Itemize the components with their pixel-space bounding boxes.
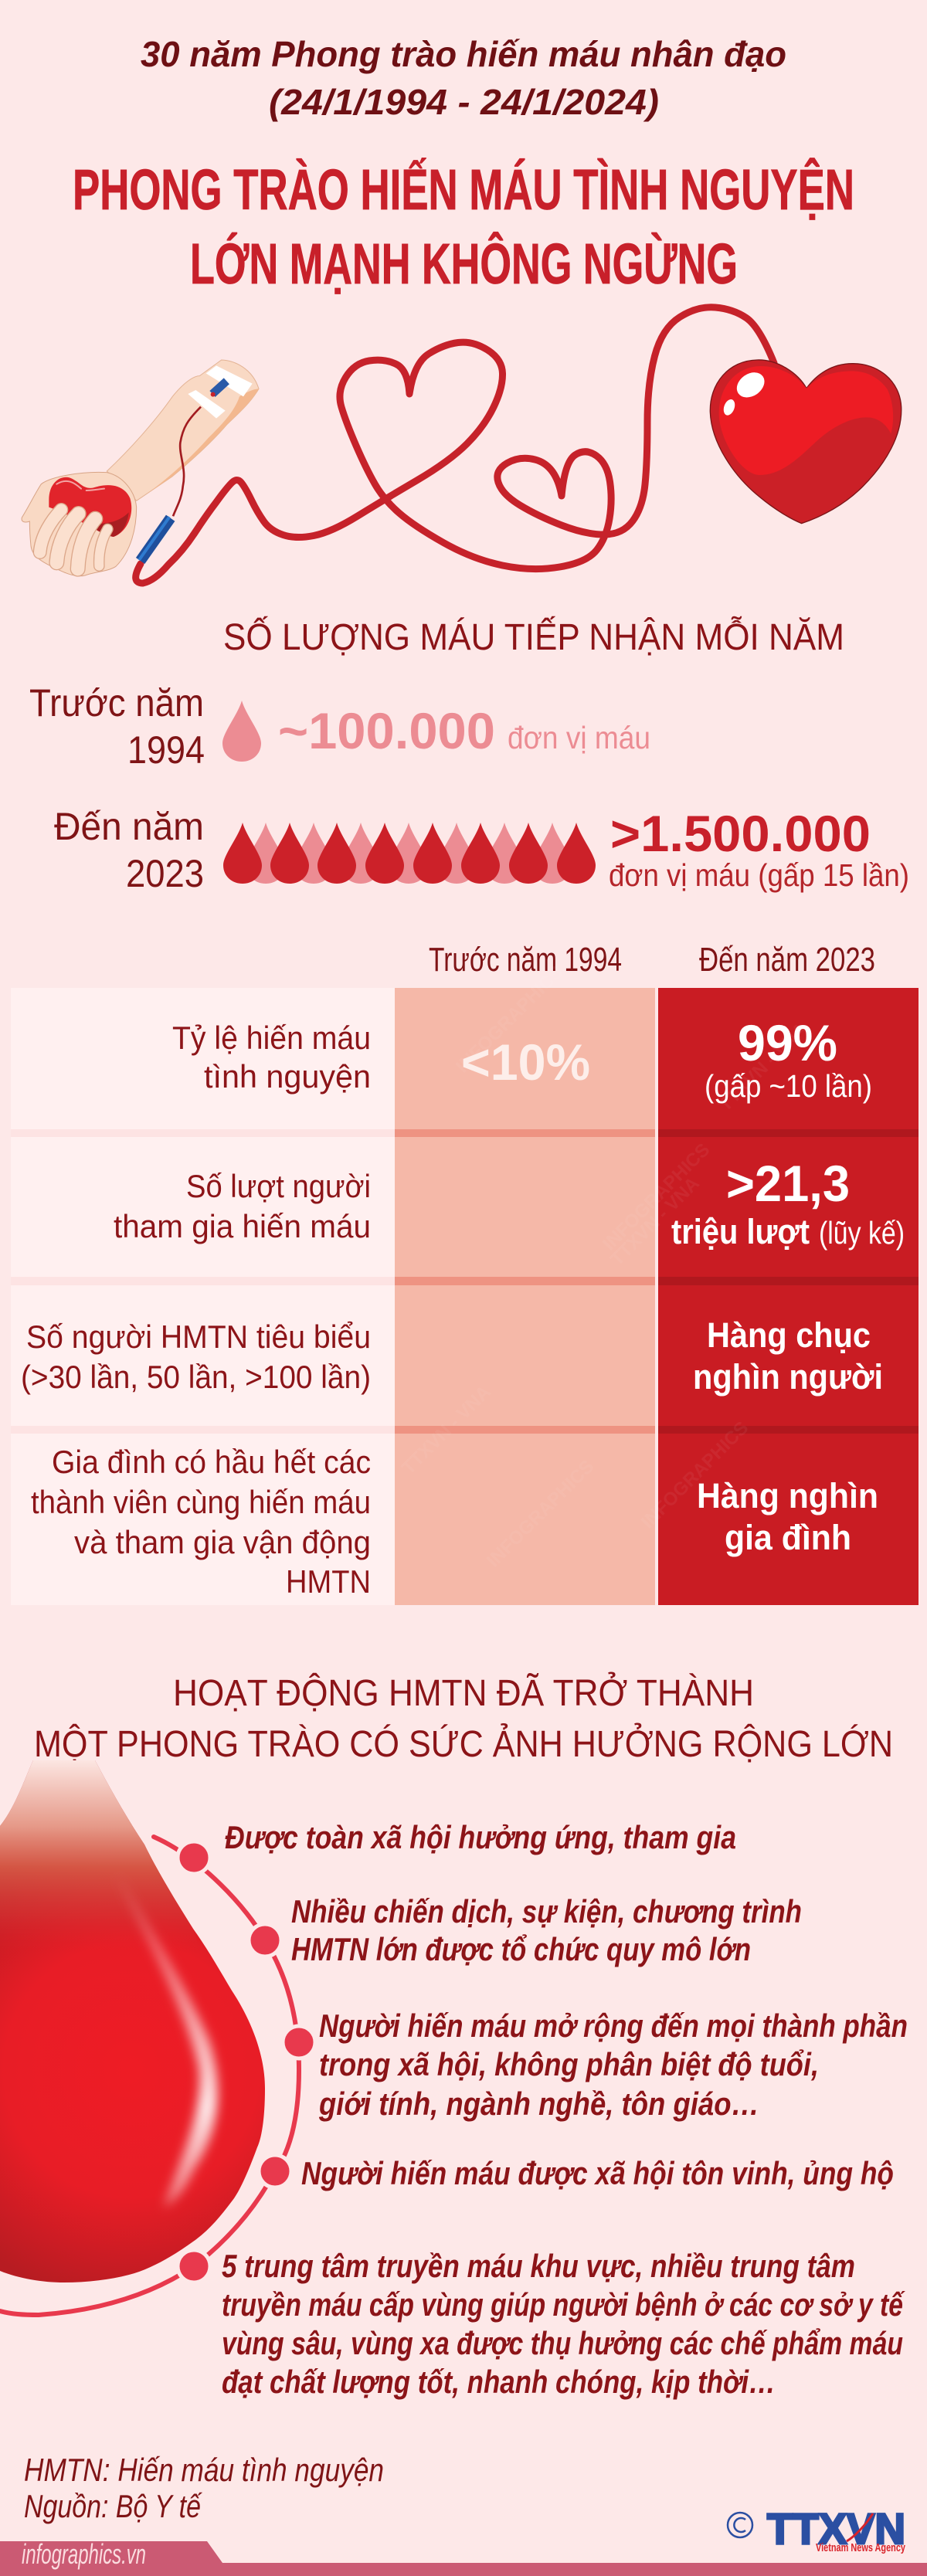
label: to 2023 xyxy=(54,805,204,895)
row 3: exemplary donors: Hàng chục xyxy=(707,1315,871,1355)
faint watermarks: TTXVN - VNA xyxy=(715,1019,812,1115)
row 4: donor families: và tham gia vận động xyxy=(74,1524,371,1560)
icon: tapes and cannula xyxy=(173,365,253,516)
row 2: participants xyxy=(114,1155,905,1251)
row 4: donor families: Hàng nghìn xyxy=(697,1476,878,1515)
row 1: voluntary donation rate: (gấp ~10 lần) xyxy=(705,1068,872,1104)
row 2: participants: triệu lượt xyxy=(671,1212,810,1251)
label: to 2023: Đến năm xyxy=(54,805,204,848)
heading: movement influence xyxy=(34,1672,893,1765)
row 4: donor families xyxy=(31,1444,878,1600)
label: before 1994: 1994 xyxy=(127,728,205,772)
table column headers: Trước năm 1994 xyxy=(429,941,622,979)
list item 2: Nhiều chiến dịch, sự kiện, chương trình xyxy=(291,1893,802,1929)
icon: blue collector tube xyxy=(139,517,171,561)
row 1: voluntary donation rate xyxy=(172,1014,872,1104)
row 3: exemplary donors xyxy=(21,1315,883,1397)
row 2: participants: >21,3 xyxy=(726,1155,850,1212)
table background columns xyxy=(11,988,919,1605)
row 3: exemplary donors: nghìn người xyxy=(693,1357,883,1397)
row 4: donor families: thành viên cùng hiến máu xyxy=(31,1484,371,1520)
row 1: voluntary donation rate: <10% xyxy=(461,1033,590,1091)
row 4: donor families: gia đình xyxy=(725,1518,851,1557)
list item 3: trong xã hội, không phân biệt độ tuổi, xyxy=(319,2046,819,2082)
list item 2: HMTN lớn được tổ chức quy mô lớn xyxy=(291,1931,751,1967)
heading: movement influence: HOẠT ĐỘNG HMTN ĐÃ TRỞ THÀNH xyxy=(173,1672,754,1714)
comparison table xyxy=(11,941,919,1605)
list item 3: giới tính, ngành nghề, tôn giáo… xyxy=(318,2086,759,2122)
table column headers: Đến năm 2023 xyxy=(699,941,875,979)
faint watermarks: INFOGRAPHICS xyxy=(452,962,567,1077)
footer bar with site tag xyxy=(0,2538,927,2576)
icon: blood tube forming hearts xyxy=(136,307,774,583)
heading: annual blood volume: SỐ LƯỢNG MÁU TIẾP NHẬN MỖI NĂM xyxy=(223,616,844,658)
list item 5 xyxy=(222,2248,905,2400)
row 2: participants: Số lượt người xyxy=(186,1168,371,1204)
faint watermarks: INFOGRAPHICS xyxy=(637,1417,752,1532)
timeline arc with dots xyxy=(0,1837,315,2315)
value: 100,000 units xyxy=(278,702,650,759)
list item 2 xyxy=(291,1893,802,1967)
list item 5: đạt chất lượng tốt, nhanh chóng, kịp thời… xyxy=(222,2364,776,2400)
row 2: participants: tham gia hiến máu xyxy=(114,1208,371,1244)
footnote and source xyxy=(24,2452,384,2524)
icon: arm squeezing ball xyxy=(22,360,259,576)
icon: copyright mark xyxy=(728,2513,752,2537)
value: 1,500,000 units xyxy=(609,805,909,893)
row 3: exemplary donors: Số người HMTN tiêu biểu xyxy=(26,1319,371,1355)
timeline dots xyxy=(178,1841,315,2282)
icon: big glossy heart xyxy=(710,360,902,524)
faint watermarks: INFOGRAPHICS xyxy=(483,1456,598,1571)
icon: row of fifteen drops xyxy=(223,823,596,884)
row 4: donor families: HMTN xyxy=(286,1563,371,1600)
title xyxy=(73,158,854,296)
value: 100,000 units: ~100.000 xyxy=(278,702,495,759)
row 1: voluntary donation rate: tình nguyện xyxy=(204,1058,371,1095)
logo: TTXVN: TTXVN xyxy=(767,2504,905,2553)
value: 100,000 units: đơn vị máu xyxy=(508,720,650,755)
row 2: participants: (lũy kế) xyxy=(819,1215,905,1251)
label: to 2023: 2023 xyxy=(126,852,204,895)
footnote and source: Nguồn: Bộ Y tế xyxy=(24,2488,202,2524)
label: before 1994: Trước năm xyxy=(29,681,204,725)
faint watermarks: TTXVN - VNA xyxy=(606,1173,704,1270)
faint watermarks: INFOGRAPHICS xyxy=(599,1139,714,1254)
subtitle: (24/1/1994 - 24/1/2024) xyxy=(269,82,659,122)
value: 1,500,000 units: >1.500.000 xyxy=(610,805,871,862)
row: before 1994 xyxy=(29,681,650,772)
row 3: exemplary donors: (>30 lần, 50 lần, >100 lần) xyxy=(21,1359,371,1395)
faint watermarks xyxy=(398,962,812,1571)
row: to 2023 xyxy=(54,805,909,895)
footnote and source: HMTN: Hiến máu tình nguyện xyxy=(24,2452,384,2488)
row 4: donor families: Gia đình có hầu hết các xyxy=(52,1444,371,1480)
label: before 1994 xyxy=(29,681,205,772)
table column headers xyxy=(429,941,875,979)
row 1: voluntary donation rate: Tỷ lệ hiến máu xyxy=(172,1020,371,1056)
subtitle xyxy=(141,34,786,122)
faint watermarks: TTXVN - VNA xyxy=(398,1382,495,1478)
list item 3 xyxy=(318,2008,908,2122)
list item 1: Được toàn xã hội hưởng ứng, tham gia xyxy=(225,1819,736,1855)
row 1: voluntary donation rate: 99% xyxy=(738,1014,837,1071)
subtitle: 30 năm Phong trào hiến máu nhân đạo xyxy=(141,34,786,74)
icon: single pale drop xyxy=(222,701,261,762)
illustration: blood donation arm, tube and heart xyxy=(22,307,902,583)
icon: large blood drop xyxy=(0,1760,265,2282)
footer bar with site tag: infographics.vn xyxy=(22,2538,146,2570)
